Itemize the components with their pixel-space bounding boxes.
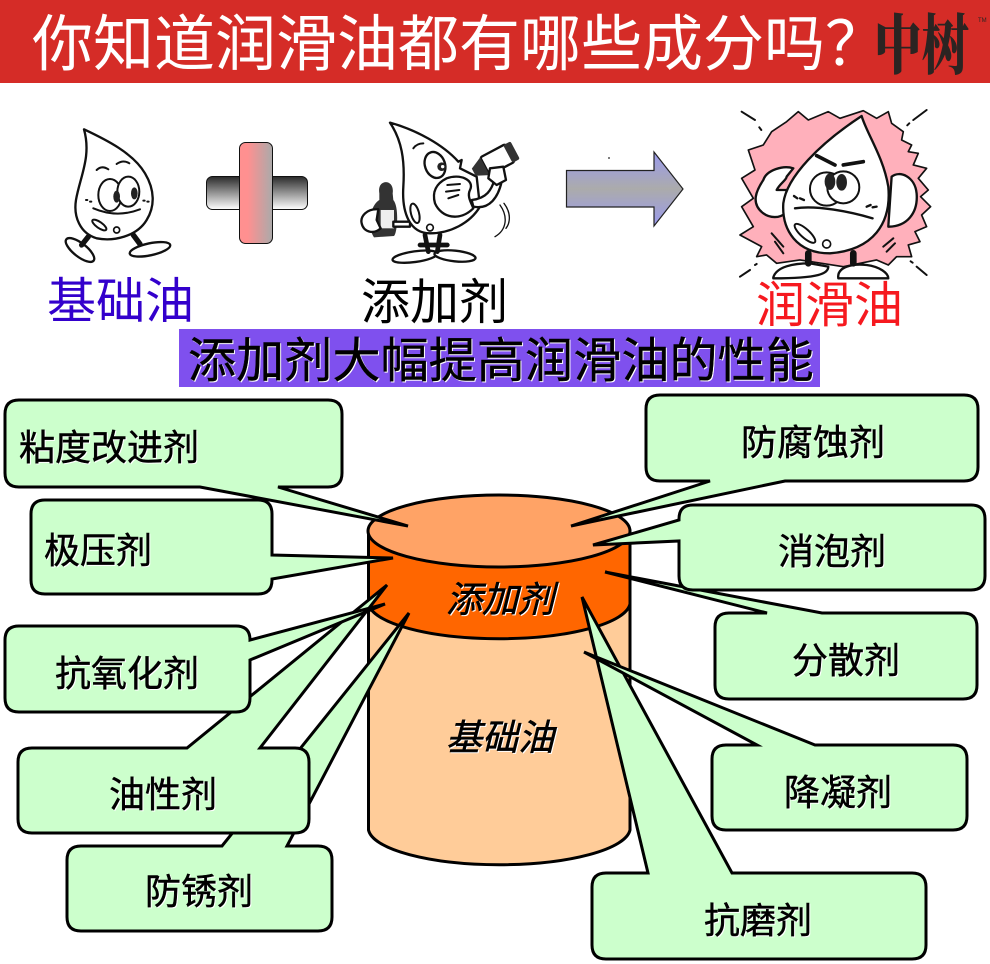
callout: 降凝剂: 降凝剂 (784, 772, 892, 813)
icon: additive droplet drinking (361, 123, 520, 265)
callout: 极压剂 (31, 500, 393, 594)
header banner (0, 0, 990, 83)
callout: 防腐蚀剂 (571, 395, 978, 526)
icon: plus sign (206, 142, 308, 244)
cylinder: additive layer (368, 531, 630, 639)
callout: 极压剂: 极压剂 (44, 530, 152, 571)
logo: 中树: TM (978, 18, 987, 24)
callout: 分散剂 (605, 572, 977, 699)
cylinder label: 添加剂: 添加剂 (446, 579, 559, 620)
subtitle banner: 添加剂大幅提高润滑油的性能 (188, 335, 814, 388)
cylinder diagram (368, 495, 630, 865)
label: 润滑油: 润滑油 (756, 279, 903, 333)
title: 你知道润滑油都有哪些成分吗？ (32, 10, 886, 78)
callout: 粘度改进剂 (5, 400, 408, 526)
callout: 抗磨剂: 抗磨剂 (704, 900, 812, 941)
icon: base oil droplet walking (62, 129, 171, 266)
callout: 抗氧化剂: 抗氧化剂 (55, 653, 199, 694)
callout: 防锈剂 (67, 613, 409, 931)
callout: 降凝剂 (584, 652, 967, 830)
cylinder: top surface (368, 495, 630, 567)
callout: 分散剂: 分散剂 (792, 640, 900, 681)
callout: 抗磨剂 (582, 597, 926, 959)
icon: strong lubricant droplet (740, 110, 931, 278)
callout: 抗氧化剂 (5, 604, 385, 712)
label: 添加剂: 添加剂 (361, 276, 508, 330)
callout: 防腐蚀剂: 防腐蚀剂 (741, 422, 885, 463)
callout: 防锈剂: 防锈剂 (145, 871, 253, 912)
cylinder label: 基础油: 基础油 (446, 717, 557, 758)
callout: 粘度改进剂: 粘度改进剂 (19, 427, 199, 468)
callout: 油性剂: 油性剂 (109, 774, 217, 815)
callout: 消泡剂 (593, 505, 985, 590)
icon: arrow (566, 152, 683, 226)
callout: 油性剂 (18, 585, 387, 833)
cylinder: base oil layer (368, 560, 630, 865)
callout: 消泡剂: 消泡剂 (778, 531, 886, 572)
label: 基础油: 基础油 (47, 275, 194, 329)
